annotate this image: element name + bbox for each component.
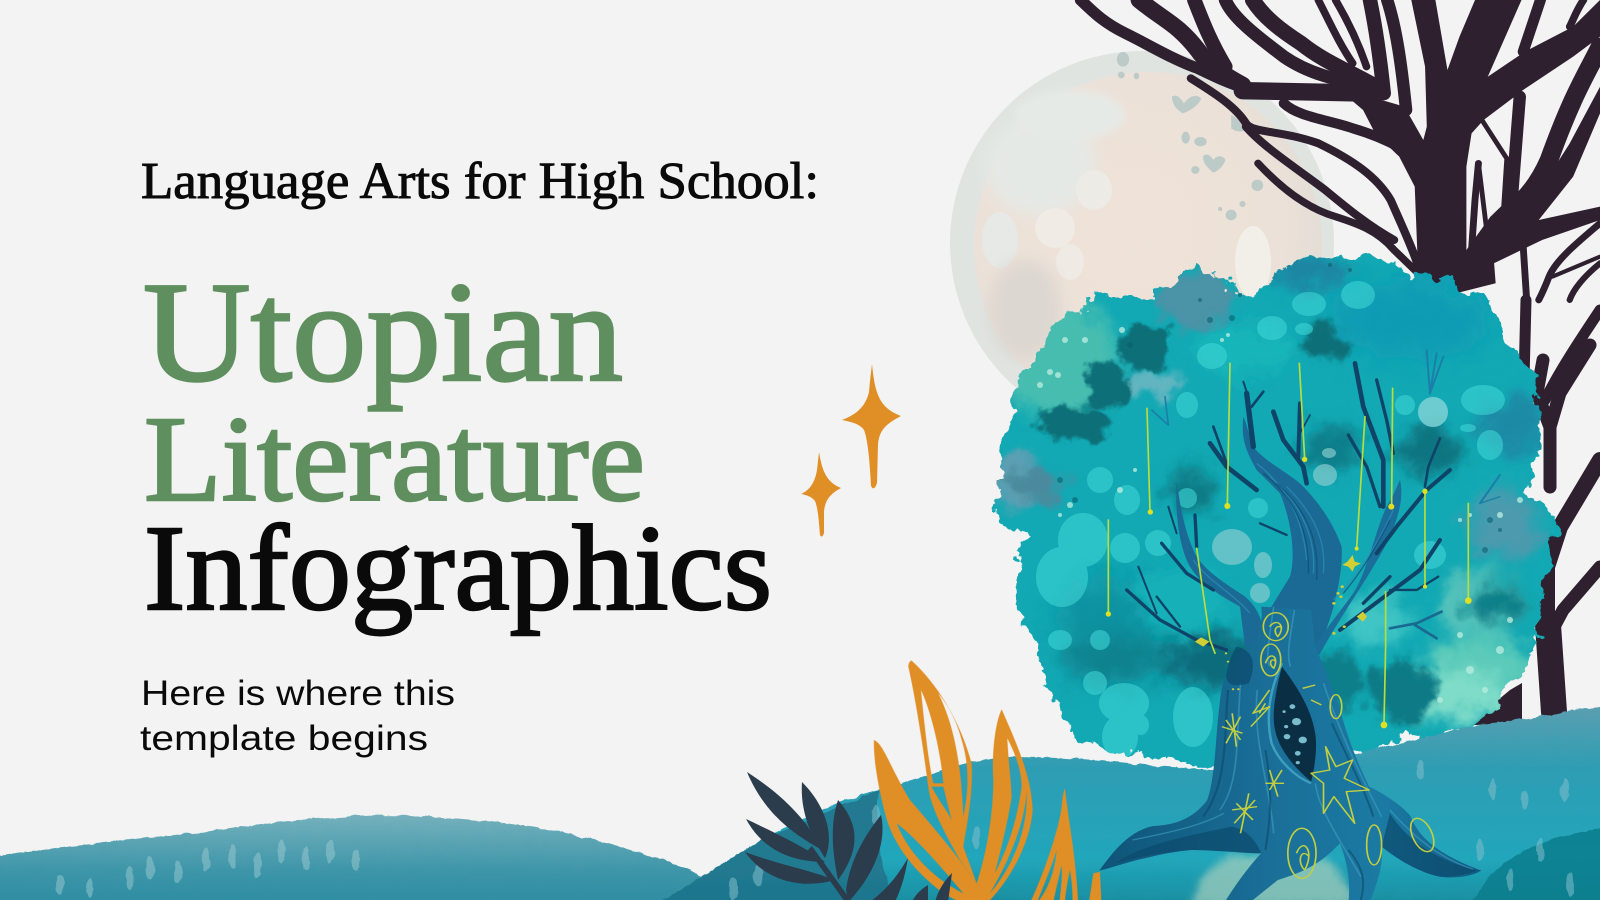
leaf: stub [1088, 872, 1102, 900]
watercolor canopy [992, 253, 1562, 769]
dark tree main trunk and branches [1081, 0, 1600, 300]
trunk bark strokes [1133, 607, 1473, 877]
sparkle stars [801, 364, 901, 537]
hill: left foreground hill [0, 816, 740, 900]
orange plant [874, 661, 1102, 900]
central limb [1243, 417, 1342, 660]
trunk dark shade [1116, 647, 1477, 877]
title line: Utopian: Utopian [143, 253, 623, 411]
right limb [1313, 480, 1401, 660]
moon hearts and spots [1117, 52, 1263, 220]
bare dark tree [1081, 0, 1600, 725]
leaf: solid left [874, 740, 993, 900]
moon [950, 51, 1334, 435]
canopy small twigs [1152, 350, 1500, 503]
blue tree limbs [1127, 363, 1450, 660]
dark leaf branch [745, 772, 952, 900]
dark twigs [1127, 363, 1450, 650]
canopy bokeh circles [1036, 281, 1505, 759]
canopy dark blotches [1042, 322, 1347, 441]
title line: Literature: Literature [144, 392, 645, 527]
hill: right back hill [655, 705, 1600, 900]
trunk hollow [1269, 663, 1316, 783]
subtitle top: Language Arts for High School: [141, 153, 819, 210]
leaf: tall [908, 661, 977, 883]
dark tree right trunk [1469, 300, 1600, 725]
leaf: far right [1028, 788, 1078, 900]
small sparkle [801, 452, 841, 537]
yellow doodles on trunk [1222, 613, 1438, 878]
description line 1: Here is where this [141, 674, 455, 713]
canopy speckles [1037, 327, 1523, 703]
blue tree trunk [1099, 555, 1481, 900]
description line 2: template begins [140, 719, 428, 758]
leaf: outline right [977, 709, 1033, 900]
limb bark stripes [1193, 463, 1393, 613]
large sparkle [842, 364, 901, 488]
title line: Infographics: Infographics [144, 501, 772, 636]
hanging yellow threads [1106, 363, 1472, 728]
left fork limb [1176, 482, 1267, 647]
canopy washes [993, 248, 1548, 721]
canopy pale bokeh [1212, 397, 1448, 603]
